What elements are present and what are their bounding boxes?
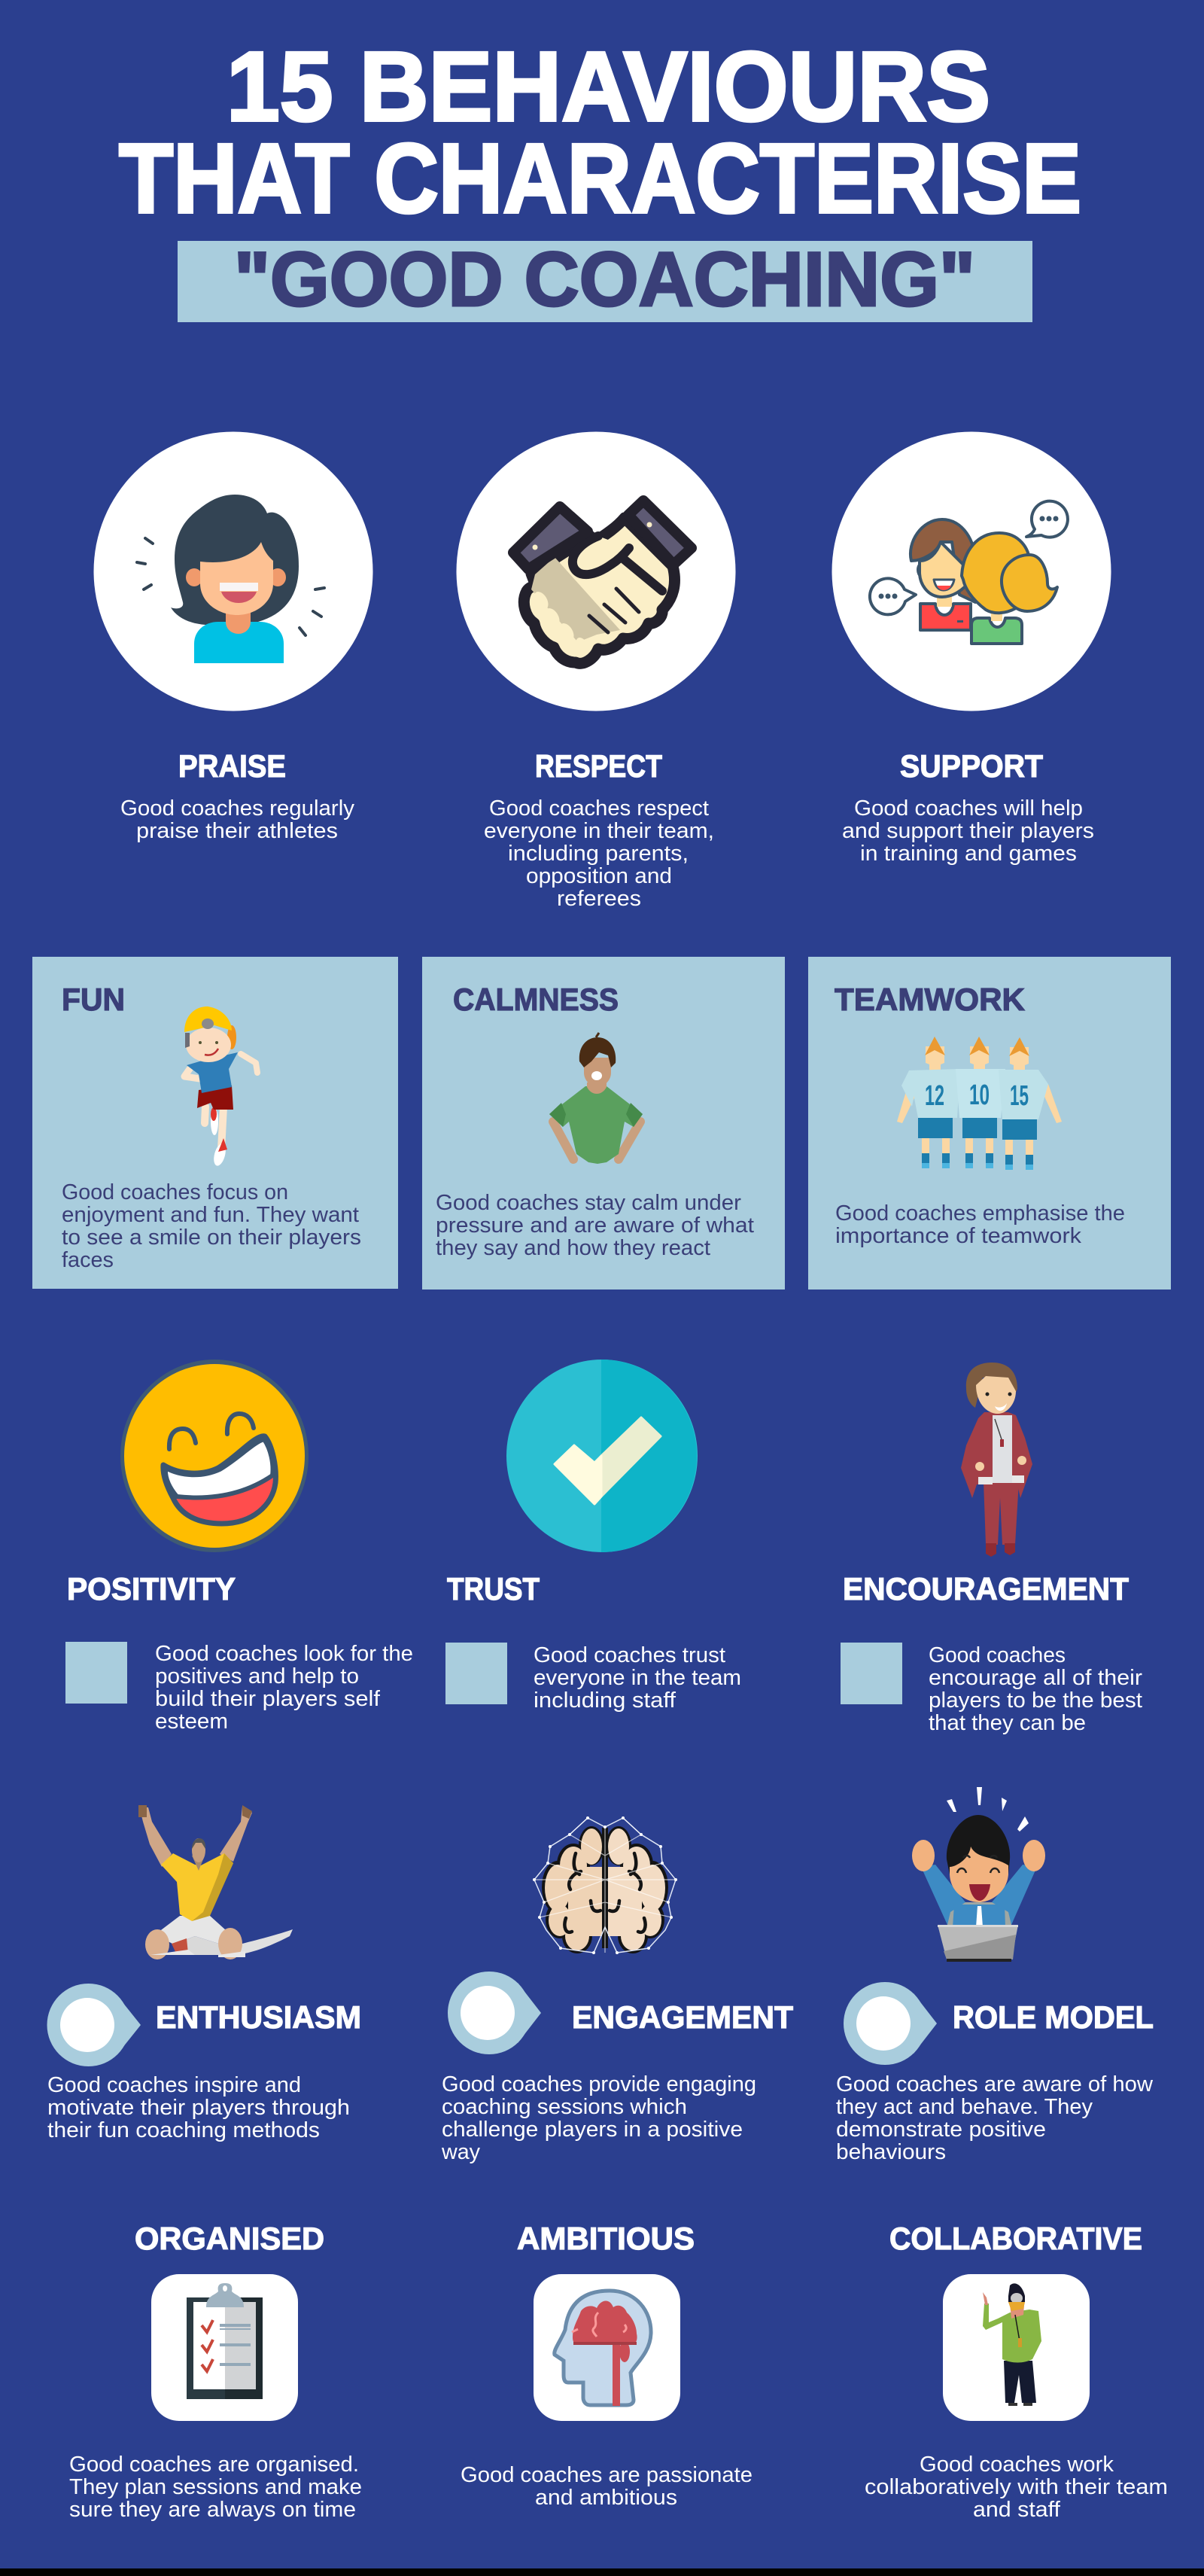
description: Good coaches trust [534,1643,725,1667]
description [441,2072,756,2164]
panel: teamwork [808,957,1171,1290]
description: faces [62,1248,114,1272]
icon: smiling woman [137,495,324,663]
icon: three football players: 15 [1010,1080,1029,1112]
icon: head with brain [534,2274,680,2421]
description: referees [557,887,641,911]
icon: clipboard checklist [151,2274,298,2421]
icon: laughing face [120,1360,309,1552]
panel: fun [32,957,398,1289]
heading: TRUST [447,1571,540,1606]
description: importance of teamwork [835,1224,1082,1248]
description: Good coaches regularly [120,796,354,821]
description [69,2453,362,2522]
icon: kneeling celebrating player [138,1805,293,1959]
bullet square [445,1643,507,1704]
panel: positivity [65,1360,413,1734]
description: in training and games [860,842,1077,866]
panel: ambitious [461,2221,752,2510]
icon: three football players: 12 [925,1080,944,1112]
description [835,1201,1125,1248]
description: Good coaches look for the [155,1642,413,1666]
description: Good coaches focus on [62,1180,288,1204]
heading: ROLE MODEL [953,1999,1154,2035]
badge [844,1982,937,2065]
description: and staff [973,2498,1061,2522]
description: they act and behave. They [836,2095,1093,2119]
description: sure they are always on time [69,2498,356,2522]
subtitle banner: "GOOD COACHING" [234,236,975,322]
description: esteem [155,1710,228,1734]
description: build their players self [155,1687,381,1711]
description: demonstrate positive [836,2118,1046,2142]
description: way [441,2140,480,2164]
description: Good coaches will help [854,796,1083,821]
heading: CALMNESS [453,982,619,1017]
title: 15 BEHAVIOURS [227,31,990,142]
description: everyone in the team [534,1666,741,1690]
description: Good coaches stay calm under [436,1191,741,1215]
description: behaviours [836,2140,946,2164]
badge [448,1972,541,2054]
description: Good coaches provide engaging [442,2072,756,2096]
heading: ENGAGEMENT [572,1999,793,2035]
description [461,2463,752,2510]
description: Good coaches inspire and [47,2073,301,2097]
description: enjoyment and fun. They want [62,1203,359,1227]
description: that they can be [929,1711,1086,1735]
badge [47,1984,141,2066]
panel: encouragement [841,1363,1142,1735]
description [155,1642,413,1734]
description: Good coaches are aware of how [836,2072,1154,2096]
description: pressure and are aware of what [436,1213,754,1238]
heading: COLLABORATIVE [889,2221,1142,2256]
description [865,2453,1168,2522]
description: players to be the best [929,1688,1142,1713]
heading: ENTHUSIASM [156,1999,361,2035]
description: their fun coaching methods [47,2118,320,2142]
description: and support their players [842,819,1094,843]
heading: TEAMWORK [835,982,1025,1017]
description [120,796,354,843]
icon: three football players [897,1037,1062,1170]
description [484,796,714,911]
heading: SUPPORT [900,748,1043,784]
description: positives and help to [155,1664,359,1688]
description: including parents, [508,842,689,866]
heading: ORGANISED [135,2221,324,2256]
description: challenge players in a positive [442,2118,743,2142]
icon: brain with network [533,1816,677,1954]
description: coaching sessions which [442,2095,687,2119]
description [62,1180,361,1272]
description: Good coaches [929,1643,1066,1667]
panel: praise [93,432,373,843]
icon: running boy [184,1006,257,1167]
title [119,31,1081,233]
description [436,1191,754,1260]
title: THAT CHARACTERISE [119,123,1081,233]
heading: ENCOURAGEMENT [843,1571,1129,1606]
heading: RESPECT [535,748,662,784]
panel: engagement [441,1816,793,2164]
bullet square [841,1643,902,1704]
description: They plan sessions and make [69,2475,362,2499]
description: motivate their players through [47,2096,350,2120]
panel: role model [836,1787,1154,2164]
icon: calm man [549,1033,643,1164]
panel: enthusiasm [47,1805,361,2142]
description [836,2072,1154,2164]
description: opposition and [526,864,672,888]
icon: cheering man at laptop [912,1787,1045,1962]
description: Good coaches are organised. [69,2453,359,2477]
description: everyone in their team, [484,819,714,843]
heading: AMBITIOUS [517,2221,695,2256]
panel: respect [456,432,736,911]
heading: PRAISE [178,748,286,784]
icon: coach with whistle [943,2274,1090,2421]
icon: check mark [506,1360,698,1552]
panel: trust [445,1360,741,1713]
description: Good coaches emphasise the [835,1201,1125,1226]
description: Good coaches respect [489,796,709,821]
bullet square [65,1642,127,1704]
panel: organised [69,2221,362,2522]
description: Good coaches work [920,2453,1114,2477]
icon: coach in tracksuit [961,1363,1032,1557]
description [534,1643,741,1713]
panel: support [832,432,1111,866]
description: encourage all of their [929,1666,1142,1690]
description: collaboratively with their team [865,2475,1168,2499]
description: including staff [534,1688,676,1713]
description: Good coaches are passionate [461,2463,752,2487]
description [929,1643,1142,1735]
description [47,2073,350,2142]
description: they say and how they react [436,1236,710,1260]
panel: collaborative [865,2221,1168,2522]
heading: POSITIVITY [67,1571,236,1606]
description [842,796,1094,866]
description: to see a smile on their players [62,1226,361,1250]
description: praise their athletes [136,819,338,843]
heading: FUN [62,982,125,1017]
icon: three football players: 10 [969,1079,990,1111]
description: and ambitious [535,2486,677,2510]
icon: two women talking [870,501,1068,644]
icon: handshake [513,501,692,670]
panel: calmness [422,957,785,1290]
